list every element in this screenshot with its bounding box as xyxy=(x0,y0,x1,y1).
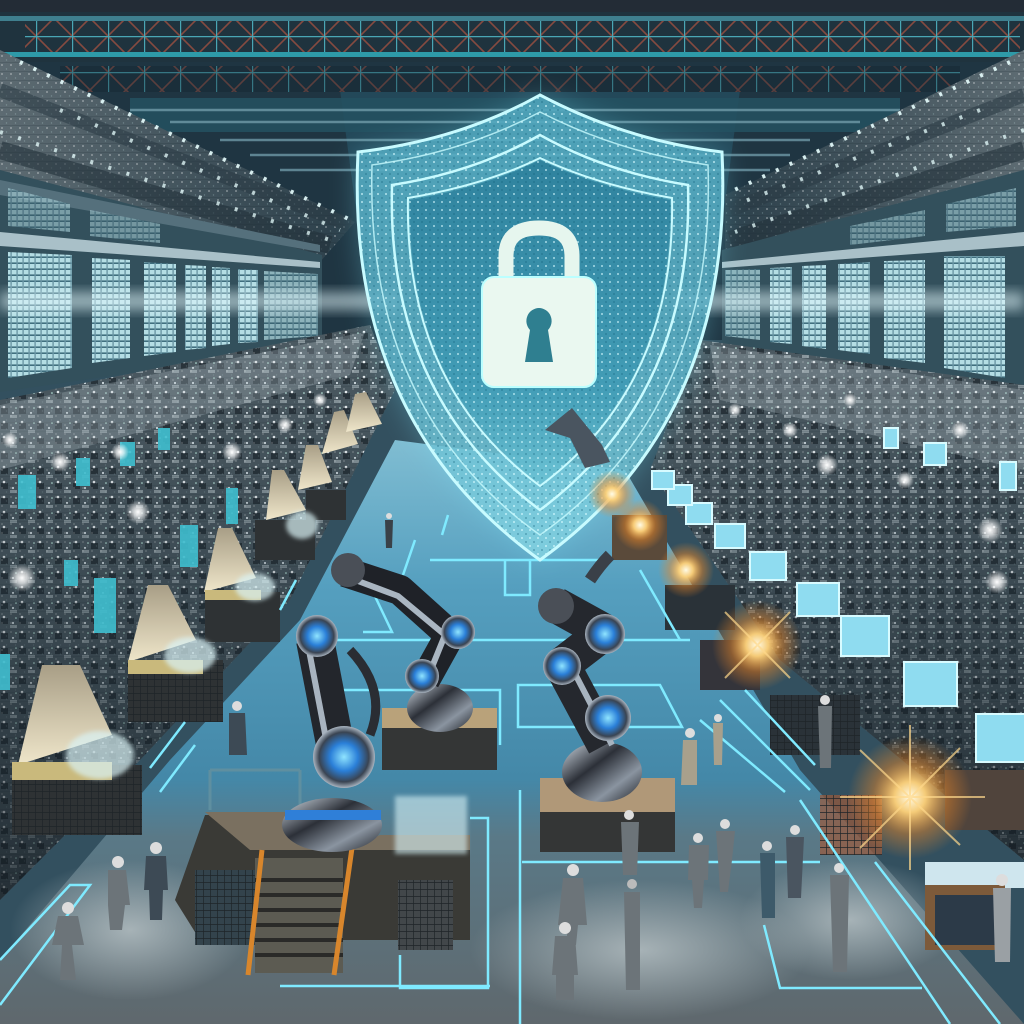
right ceiling xyxy=(725,50,1024,250)
workers xyxy=(52,513,1011,1000)
shield body xyxy=(357,95,723,560)
small robotic arm on shield xyxy=(545,408,610,468)
padlock body xyxy=(482,277,596,387)
robot base xyxy=(282,798,382,852)
padlock xyxy=(482,228,596,387)
right robot arm xyxy=(538,555,675,852)
robot base xyxy=(540,800,675,852)
light flares xyxy=(588,470,985,870)
left wall with windows xyxy=(0,170,322,392)
keyhole xyxy=(525,308,553,362)
left front robot arm xyxy=(282,615,382,852)
robot arm segments xyxy=(345,572,450,680)
left lit work cells xyxy=(0,392,382,835)
robot base xyxy=(382,710,497,770)
machine light bulbs xyxy=(2,393,1009,594)
robot arm body xyxy=(556,605,605,745)
digital shield xyxy=(357,95,723,560)
shield glow xyxy=(357,95,723,560)
right work tables xyxy=(612,515,1024,950)
robot arm body xyxy=(315,640,340,770)
left machine rows xyxy=(0,325,395,900)
right machine rows xyxy=(650,340,1024,860)
padlock shackle xyxy=(506,228,572,285)
right wall with windows xyxy=(722,170,1024,392)
foreground floor light pools xyxy=(10,860,960,1020)
left ceiling xyxy=(0,50,355,262)
shield dot texture xyxy=(357,95,723,560)
right overhead monitors xyxy=(652,428,1024,762)
factory floor xyxy=(0,440,1024,1024)
central robot arm xyxy=(331,553,497,770)
floor guide lines xyxy=(0,515,1000,1024)
inner shield dots xyxy=(410,160,670,484)
shield outlines xyxy=(357,95,723,560)
left front raised platform xyxy=(175,770,470,975)
inner shield panel xyxy=(410,160,670,484)
roof trusses xyxy=(0,0,1024,170)
horizontal light beams xyxy=(0,292,1024,310)
